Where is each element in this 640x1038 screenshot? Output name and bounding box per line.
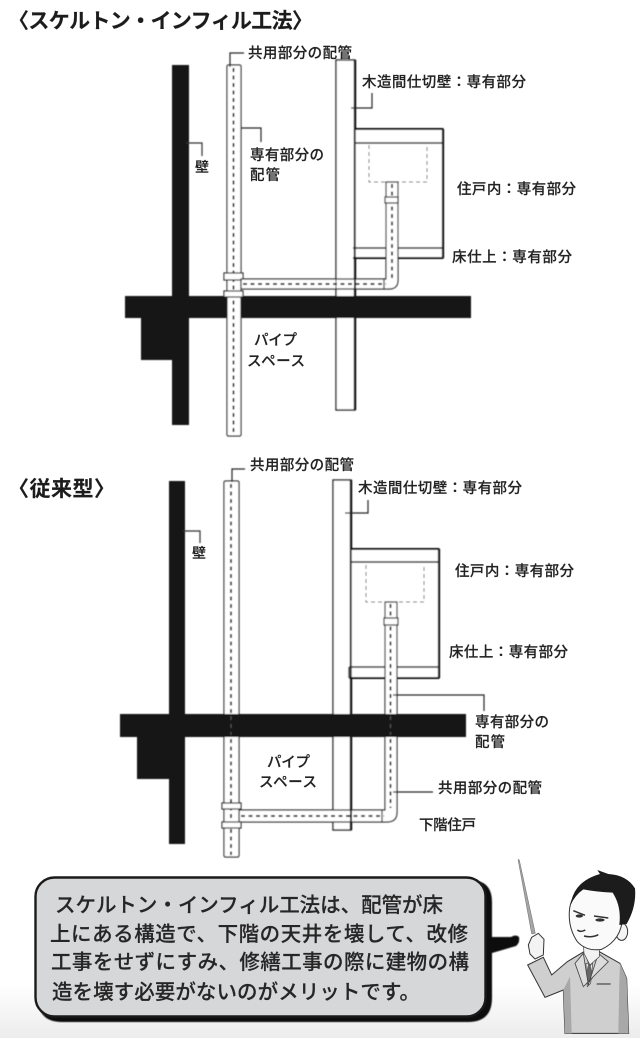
room interior	[349, 549, 439, 678]
character: presenter with pointer	[518, 859, 635, 1033]
label: room: 住戸内：専有部分	[455, 563, 574, 580]
bubble text: 造を壊す必要がないのがメリットです。	[52, 981, 420, 1004]
bubble text: 工事をせずにすみ、修繕工事の際に建物の構	[51, 951, 469, 974]
label: private pipe	[475, 714, 549, 751]
wall	[169, 481, 185, 844]
title: skeleton infill method: 〈スケルトン・インフィル工法〉	[8, 10, 313, 33]
diagram: conventional	[120, 469, 484, 857]
label: private pipe: 配管	[250, 166, 280, 184]
beam	[141, 316, 173, 360]
bubble text: 上にある構造で、下階の天井を壊して、改修	[50, 923, 468, 946]
label: pipe space: スペース	[259, 775, 317, 791]
labels: conventional	[192, 456, 574, 834]
title: conventional type: 〈従来型〉	[8, 478, 115, 501]
callout: speech bubble	[36, 878, 519, 1022]
leader lines	[232, 469, 484, 792]
beam	[137, 735, 170, 779]
label: pipe space: パイプ	[254, 332, 298, 349]
label: partition: 木造間仕切壁：専有部分	[358, 480, 522, 497]
floor slab	[120, 714, 466, 737]
face	[569, 883, 623, 950]
wooden partition	[333, 480, 351, 830]
private and shared drain pipe	[239, 602, 398, 822]
wall leader	[183, 531, 200, 543]
label: shared pipe: 共用部分の配管	[248, 44, 352, 62]
bubble text: スケルトン・インフィル工法は、配管が床	[55, 894, 443, 917]
label: wall: 壁	[192, 545, 206, 561]
lapels	[575, 953, 608, 987]
diagram: skeleton infill	[125, 53, 471, 436]
label: wall: 壁	[195, 159, 209, 175]
leader lines	[230, 53, 372, 142]
wall leader	[186, 143, 202, 156]
label: pipe space	[259, 754, 317, 791]
label: pipe space: スペース	[247, 354, 305, 370]
label: partition: 木造間仕切壁：専有部分	[362, 74, 526, 91]
bubble body	[36, 878, 486, 1016]
hand	[528, 933, 544, 959]
label: floor finish: 床仕上：専有部分	[452, 249, 572, 266]
bubble text	[50, 894, 469, 1004]
label: private pipe: 専有部分の	[475, 714, 549, 731]
labels: skeleton infill	[195, 44, 576, 370]
wooden partition	[336, 60, 355, 410]
room interior	[353, 129, 443, 258]
label: private pipe	[250, 147, 324, 184]
suit shading	[563, 963, 629, 1033]
label: pipe space	[247, 332, 305, 370]
label: shared pipe lower: 共用部分の配管	[438, 779, 542, 797]
shared pipe	[222, 481, 241, 857]
private pipe	[241, 182, 398, 289]
label: private pipe: 専有部分の	[250, 147, 324, 164]
shared pipe	[224, 65, 243, 436]
eyes, nose and mouth	[573, 911, 608, 937]
label: unit below: 下階住戸	[419, 817, 476, 834]
bubble shadow and tail	[38, 880, 519, 1022]
pipe crossing slab	[231, 716, 390, 735]
label: private pipe: 配管	[475, 733, 505, 751]
wall	[172, 65, 189, 425]
label: shared pipe: 共用部分の配管	[250, 456, 354, 474]
label: room: 住戸内：専有部分	[457, 181, 576, 198]
pointer stick	[518, 859, 535, 934]
hair	[571, 870, 635, 925]
neck and ear	[583, 943, 599, 965]
label: pipe space: パイプ	[267, 754, 310, 771]
suit	[528, 952, 629, 1033]
floor slab	[125, 296, 471, 318]
shirt and tie	[584, 952, 598, 987]
label: floor finish: 床仕上：専有部分	[449, 644, 568, 661]
